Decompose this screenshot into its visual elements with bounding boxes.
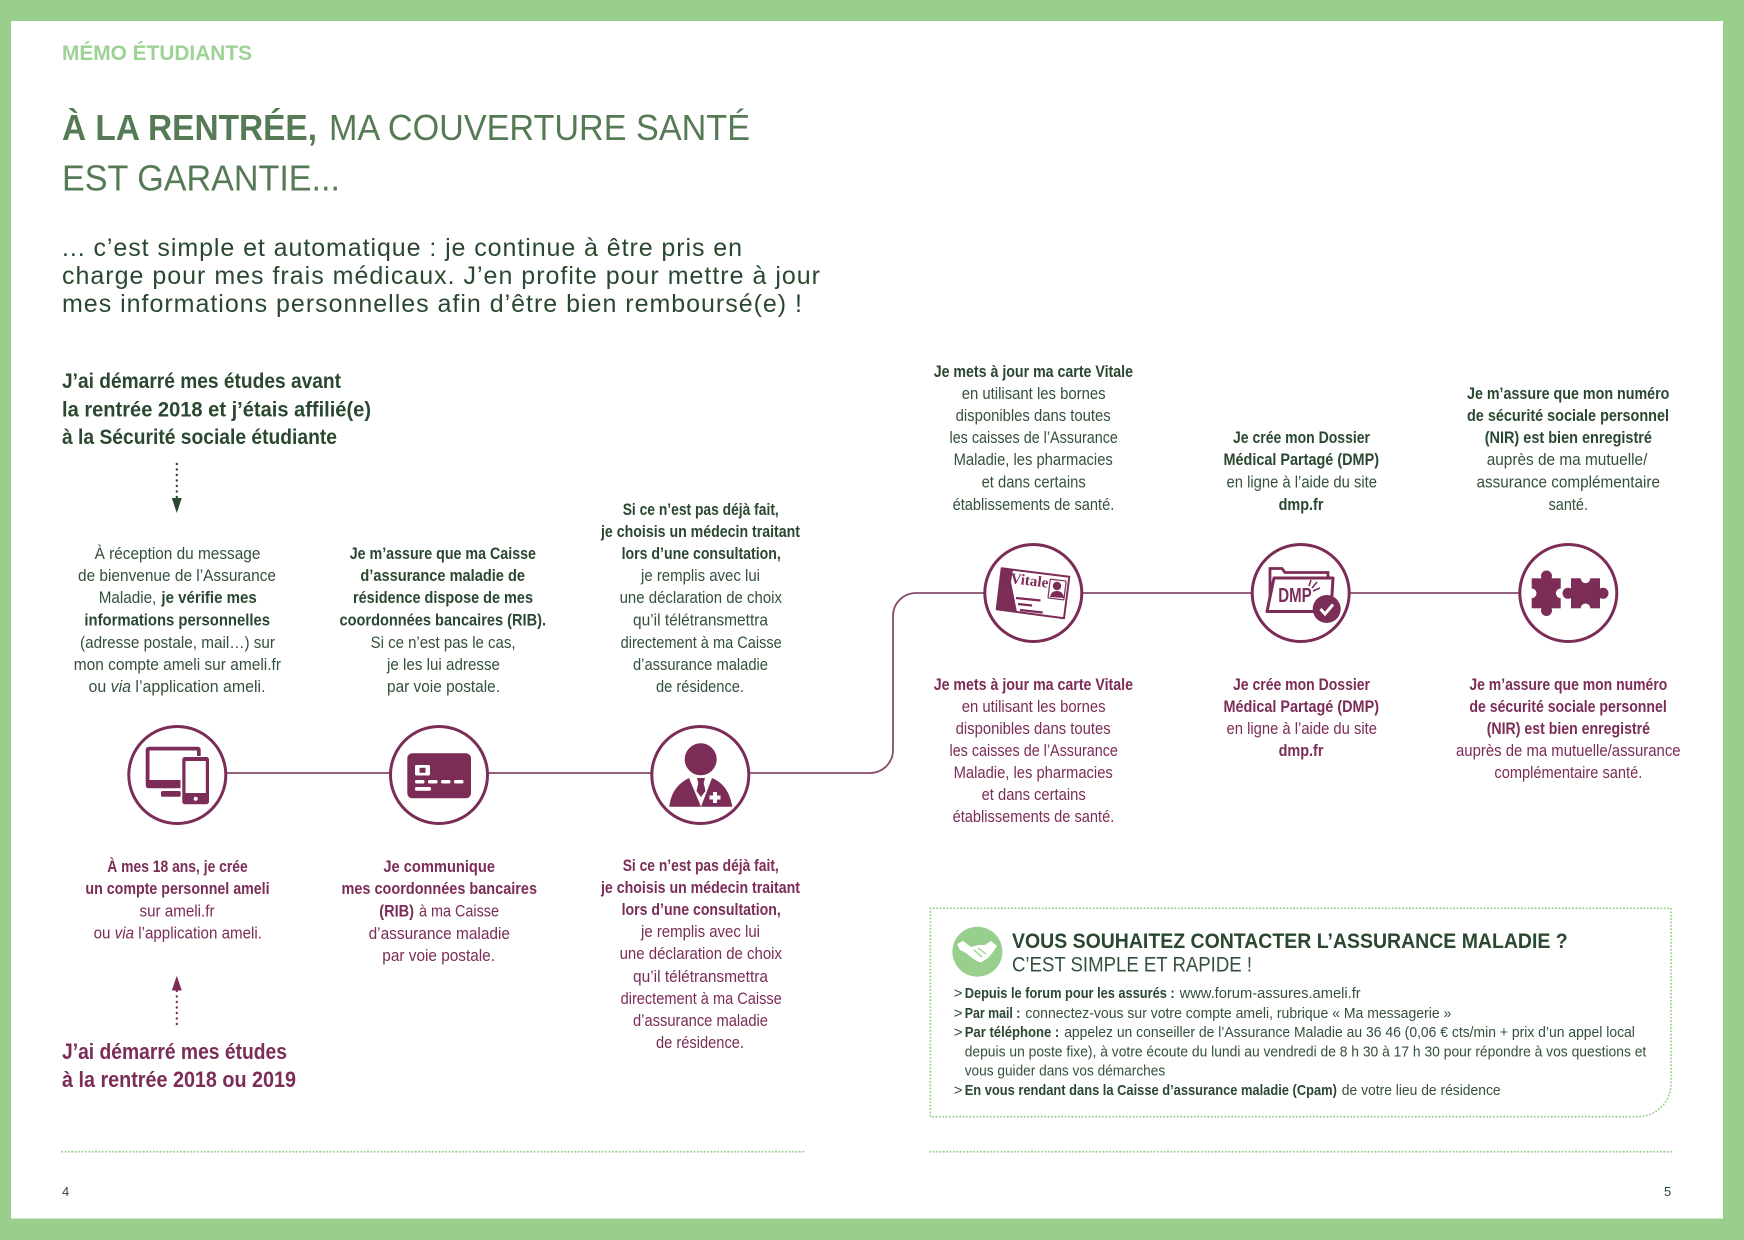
contact heading: C’EST SIMPLE ET RAPIDE ! xyxy=(1012,954,1252,976)
text: step 3 bottom: une déclaration de choix xyxy=(620,945,783,963)
text: NIR bottom xyxy=(1456,676,1681,782)
contact list: Depuis le forum pour les assurés : xyxy=(965,985,1175,1002)
title: MA COUVERTURE SANTÉ xyxy=(329,107,750,148)
icon: bank card xyxy=(390,726,488,824)
text: step 3 bottom: Si ce n’est pas déjà fait, xyxy=(623,857,779,875)
text: Vitale bottom: les caisses de l’Assurance xyxy=(950,742,1118,760)
text: DMP bottom xyxy=(1224,676,1379,760)
arrow: up xyxy=(172,976,182,1025)
text: step 1 top: je vérifie mes xyxy=(160,589,257,607)
text: NIR top: (NIR) est bien enregistré xyxy=(1485,429,1652,447)
text: NIR top: assurance complémentaire xyxy=(1476,474,1660,492)
icon: Vitale card: Vitale xyxy=(1010,571,1050,592)
text: Vitale bottom: en utilisant les bornes xyxy=(962,698,1106,716)
text: step 1 bottom: À mes 18 ans, je crée xyxy=(107,857,248,876)
text: Vitale bottom: Maladie, les pharmacies xyxy=(954,764,1113,782)
contact list: > xyxy=(954,985,963,1002)
text: Vitale top: disponibles dans toutes xyxy=(956,407,1111,425)
contact list: vous guider dans vos démarches xyxy=(965,1062,1165,1080)
text: DMP bottom: en ligne à l’aide du site xyxy=(1226,720,1377,738)
contact list: En vous rendant dans la Caisse d’assurance maladie (Cpam) xyxy=(965,1082,1337,1099)
path heading: before 2018: la rentrée 2018 et j’étais affilié(e) xyxy=(62,398,371,422)
text: step 1 top xyxy=(74,544,281,696)
text: step 3 top: une déclaration de choix xyxy=(620,589,783,607)
text: step 3 bottom: lors d’une consultation, xyxy=(622,901,781,919)
text: Vitale top: et dans certains xyxy=(982,474,1086,492)
text: step 1 bottom: sur ameli.fr xyxy=(140,902,215,920)
text: step 3 top: directement à ma Caisse xyxy=(621,634,782,652)
intro paragraph: mes informations personnelles afin d’être bien remboursé(e) ! xyxy=(62,290,802,318)
contact heading: VOUS SOUHAITEZ CONTACTER L’ASSURANCE MALADIE ? xyxy=(1012,930,1568,953)
icon: DMP folder: DMP xyxy=(1278,585,1312,607)
text: step 1 top: Maladie, xyxy=(99,589,156,607)
text: NIR bottom: Je m’assure que mon numéro xyxy=(1469,676,1667,694)
contact list: Par téléphone : xyxy=(965,1024,1059,1041)
intro paragraph: charge pour mes frais médicaux. J’en profite pour mettre à jour xyxy=(62,262,820,290)
text: step 2 top: Je m’assure que ma Caisse xyxy=(350,545,536,563)
text: Vitale bottom: et dans certains xyxy=(982,786,1086,804)
text: NIR top xyxy=(1467,385,1669,514)
text: step 2 bottom xyxy=(342,858,537,965)
text: step 3 top xyxy=(600,501,800,696)
icon: devices xyxy=(129,726,226,824)
icon: doctor xyxy=(652,726,749,824)
text: step 1 top: ou via l’application ameli. xyxy=(88,678,266,696)
text: Vitale bottom: établissements de santé. xyxy=(953,808,1114,826)
text: Vitale bottom: Je mets à jour ma carte Vitale xyxy=(934,676,1133,694)
text: step 2 top: je les lui adresse xyxy=(386,656,500,674)
path heading: from 2018: J’ai démarré mes études xyxy=(62,1039,287,1064)
text: DMP top: en ligne à l’aide du site xyxy=(1226,474,1377,492)
page number 4: 4 xyxy=(62,1184,69,1199)
contact list: appelez un conseiller de l’Assurance Maladie au 36 46 (0,06 € cts/min + prix d’un appel local xyxy=(1064,1024,1635,1041)
text: step 3 top: lors d’une consultation, xyxy=(622,545,781,563)
text: DMP top: Je crée mon Dossier xyxy=(1233,429,1370,447)
contact list: connectez-vous sur votre compte ameli, rubrique « Ma messagerie » xyxy=(1025,1005,1451,1022)
contact list: > xyxy=(954,1082,963,1099)
text: step 3 top: je remplis avec lui xyxy=(640,567,760,585)
text: step 2 bottom: mes coordonnées bancaires xyxy=(342,880,537,898)
text: NIR bottom: complémentaire santé. xyxy=(1494,764,1642,782)
text: step 1 top: mon compte ameli sur ameli.fr xyxy=(74,656,281,674)
contact list: www.forum-assures.ameli.fr xyxy=(1179,985,1361,1002)
text: NIR top: auprès de ma mutuelle/ xyxy=(1487,451,1648,469)
arrow: down xyxy=(172,464,182,513)
text: NIR bottom: auprès de ma mutuelle/assurance xyxy=(1456,742,1681,760)
title: EST GARANTIE... xyxy=(62,158,340,198)
text: Vitale top: en utilisant les bornes xyxy=(962,385,1106,403)
text: step 2 bottom: Je communique xyxy=(383,858,495,876)
text: DMP top: Médical Partagé (DMP) xyxy=(1224,451,1379,469)
text: step 2 bottom: (RIB) xyxy=(379,902,414,920)
icon: handshake xyxy=(952,927,1002,977)
text: NIR top: de sécurité sociale personnel xyxy=(1467,407,1669,425)
path heading: before 2018: à la Sécurité sociale étudiante xyxy=(62,426,337,449)
text: step 2 bottom: à ma Caisse xyxy=(419,902,499,920)
text: Vitale top xyxy=(934,363,1133,514)
contact heading xyxy=(1012,930,1568,976)
text: step 1 top: de bienvenue de l’Assurance xyxy=(78,567,276,585)
text: step 1 top: À réception du message xyxy=(95,544,260,563)
text: step 2 top: d’assurance maladie de xyxy=(360,567,525,585)
title xyxy=(62,107,750,198)
text: DMP top xyxy=(1224,429,1379,514)
text: step 3 top: qu’il télétransmettra xyxy=(633,612,769,630)
text: Vitale bottom xyxy=(934,676,1133,826)
text: NIR top: santé. xyxy=(1548,496,1588,514)
text: step 1 bottom: ou via l’application ameli. xyxy=(94,924,262,942)
timeline connector xyxy=(177,593,1568,773)
text: step 3 top: je choisis un médecin traitant xyxy=(600,523,800,541)
contact list xyxy=(954,985,1647,1099)
text: step 3 bottom: directement à ma Caisse xyxy=(621,990,782,1008)
text: NIR bottom: (NIR) est bien enregistré xyxy=(1487,720,1650,738)
text: step 2 top xyxy=(340,545,546,696)
text: step 3 top: de résidence. xyxy=(656,678,744,696)
text: step 1 bottom xyxy=(85,857,270,942)
icon: puzzle xyxy=(1520,544,1617,642)
text: step 1 top: (adresse postale, mail…) sur xyxy=(80,634,275,652)
text: step 2 top: Si ce n’est pas le cas, xyxy=(371,634,516,652)
text: Vitale top: les caisses de l’Assurance xyxy=(950,429,1118,447)
text: step 3 bottom: je remplis avec lui xyxy=(640,923,760,941)
path heading: from 2018: à la rentrée 2018 ou 2019 xyxy=(62,1067,296,1092)
page number 5: 5 xyxy=(1664,1184,1671,1199)
text: NIR top: Je m’assure que mon numéro xyxy=(1467,385,1669,403)
text: NIR bottom: de sécurité sociale personnel xyxy=(1469,698,1667,716)
contact list: de votre lieu de résidence xyxy=(1342,1082,1501,1099)
contact list: depuis un poste fixe), à votre écoute du lundi au vendredi de 8 h 30 à 17 h 30 pour répondre à vos questions et xyxy=(965,1044,1647,1060)
text: step 2 top: résidence dispose de mes xyxy=(353,589,533,607)
contact list: Par mail : xyxy=(965,1005,1020,1022)
title: À LA RENTRÉE, xyxy=(62,107,317,148)
path heading: before 2018: J’ai démarré mes études avant xyxy=(62,370,341,393)
text: Vitale top: Je mets à jour ma carte Vitale xyxy=(934,363,1133,381)
text: step 3 bottom: d’assurance maladie xyxy=(633,1012,768,1030)
text: step 1 top: informations personnelles xyxy=(84,612,270,630)
text: step 3 bottom xyxy=(600,857,800,1052)
text: step 1 bottom: un compte personnel ameli xyxy=(85,880,270,898)
text: step 2 bottom: d’assurance maladie xyxy=(369,925,510,943)
text: DMP bottom: Je crée mon Dossier xyxy=(1233,676,1370,694)
text: Vitale top: établissements de santé. xyxy=(953,496,1114,514)
text: step 2 top: coordonnées bancaires (RIB). xyxy=(340,612,546,630)
text: step 3 bottom: qu’il télétransmettra xyxy=(633,968,769,986)
section label: MÉMO ÉTUDIANTS xyxy=(62,42,252,65)
path heading: from 2018 xyxy=(62,1039,296,1092)
text: DMP top: dmp.fr xyxy=(1279,496,1324,514)
text: step 3 bottom: de résidence. xyxy=(656,1034,744,1052)
icon: Vitale card xyxy=(985,544,1082,642)
contact list: > xyxy=(954,1024,963,1041)
text: Vitale top: Maladie, les pharmacies xyxy=(954,451,1113,469)
intro paragraph: ... c’est simple et automatique : je continue à être pris en xyxy=(62,234,742,262)
text: step 3 top: d’assurance maladie xyxy=(633,656,768,674)
text: step 2 top: par voie postale. xyxy=(387,678,500,696)
text: DMP bottom: dmp.fr xyxy=(1279,742,1324,760)
text: Vitale bottom: disponibles dans toutes xyxy=(956,720,1111,738)
panel: contact box xyxy=(930,908,1671,1117)
icon: DMP folder xyxy=(1252,544,1349,642)
text: step 3 top: Si ce n’est pas déjà fait, xyxy=(623,501,779,519)
text: step 3 bottom: je choisis un médecin traitant xyxy=(600,879,800,897)
text: DMP bottom: Médical Partagé (DMP) xyxy=(1224,698,1379,716)
text: step 2 bottom: par voie postale. xyxy=(382,947,495,965)
contact list: > xyxy=(954,1005,963,1022)
intro paragraph xyxy=(62,234,820,318)
path heading: before 2018 xyxy=(62,370,371,449)
